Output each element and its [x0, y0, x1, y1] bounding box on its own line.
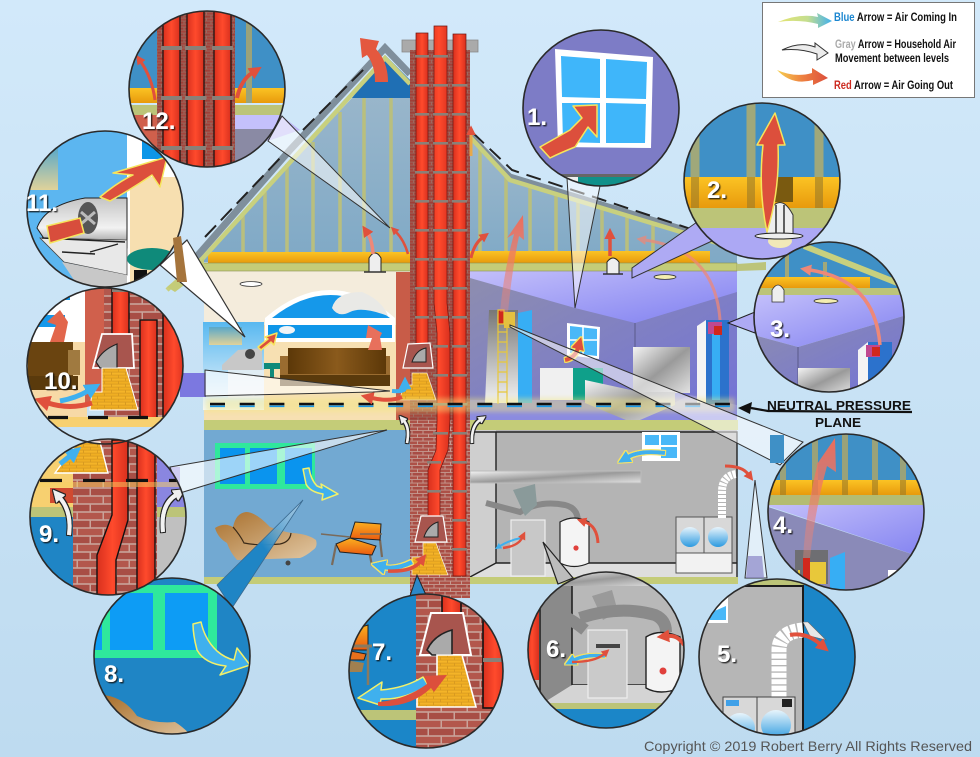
legend blue arrow: [778, 13, 832, 28]
house vents: [364, 253, 676, 279]
callout 11: range hood: 11.: [26, 190, 58, 217]
legend: [762, 2, 974, 98]
vent arrow: [608, 238, 612, 256]
washer and dryer: [722, 696, 796, 734]
living room arrow: [366, 325, 382, 350]
callout 9: plane at chimney: [28, 436, 190, 600]
water heater: [646, 632, 680, 692]
firebox: [90, 368, 138, 410]
basement window: [642, 432, 680, 461]
gray arrow right: [472, 420, 480, 443]
callout 10: upper fireplace: 10.: [44, 368, 77, 395]
neutral pressure dashed line: [210, 404, 737, 406]
basement outlines: [470, 432, 737, 577]
attic red arrow left: [368, 234, 373, 254]
white window post: [127, 129, 142, 289]
arrows: [574, 656, 605, 660]
red arrow: [48, 403, 92, 406]
main duct: [470, 471, 641, 483]
upper left room upper wall: [204, 270, 410, 325]
water heater arrow: [585, 522, 598, 543]
pointer 5: [745, 480, 767, 578]
callout 7: lower fireplace: [345, 590, 507, 750]
pointer 8: [217, 500, 303, 608]
arrow up: [757, 113, 785, 232]
arrow: [810, 270, 880, 345]
flue columns: [416, 26, 466, 576]
gable vent: [352, 55, 410, 98]
callout 6: furnace and water heater: [525, 570, 690, 731]
plenum: [513, 484, 537, 516]
room corner: [634, 323, 636, 400]
upper fireplace hood: [403, 343, 433, 368]
attic space right: [470, 133, 737, 263]
house arrows: [258, 38, 748, 571]
callout 1: window: 1.: [527, 104, 547, 131]
lower hearth red arrow: [388, 562, 420, 571]
lower left room: [204, 430, 410, 577]
brick wall: [85, 286, 105, 406]
callout 7: lower fireplace: 7.: [372, 639, 392, 666]
duct: [563, 573, 649, 586]
neutral pressure glow: [205, 398, 735, 412]
neutral pressure plane label: NEUTRAL PRESSURE: [767, 398, 911, 413]
house cutaway: [167, 26, 766, 598]
attic hatch: [795, 550, 828, 584]
red arrow: [378, 675, 447, 706]
dryer duct: [722, 474, 736, 518]
vent: [772, 285, 784, 302]
attic vent left: [364, 253, 386, 272]
arrows: [141, 62, 155, 100]
legend blue text: Blue Arrow = Air Coming In: [834, 12, 957, 24]
diverter: [96, 344, 117, 368]
arrow into window: [540, 105, 597, 158]
attic red arrow right of chimney: [471, 238, 482, 258]
arrows: [60, 498, 70, 535]
couch: [280, 348, 390, 386]
floor below plane: [25, 417, 185, 427]
callout 10: upper fireplace: [25, 286, 186, 444]
furnace red arrow: [503, 538, 522, 548]
attic studs: [243, 98, 653, 262]
flue joints: [161, 8, 233, 176]
flues: [163, 8, 231, 173]
callout 8: window leak: 8.: [104, 661, 124, 688]
callout 4: attic hatch: [765, 430, 930, 595]
kitchen area: [203, 322, 264, 410]
picture: [25, 148, 58, 190]
bed: [585, 380, 675, 423]
red brick: [50, 488, 73, 503]
basement side wall: [470, 430, 496, 577]
lower fireplace hood: [415, 516, 447, 542]
red arrow: [790, 634, 820, 644]
hood: [420, 613, 471, 655]
window corner: [708, 597, 728, 623]
attic ladder: [498, 310, 515, 404]
furnace flue: [486, 503, 578, 522]
upper hearth red arrow: [372, 397, 402, 400]
callout 3: closet: 3.: [770, 316, 790, 343]
large arrow: [100, 157, 167, 201]
callout 12: chimney top: [125, 8, 290, 176]
callout 8: window leak: [90, 575, 255, 740]
interior brick return: [396, 272, 410, 420]
legend gray arrow: [782, 43, 828, 60]
dresser: [540, 368, 573, 400]
tail of arrow: [47, 218, 84, 243]
headboard: [633, 347, 690, 393]
legend red text: Red Arrow = Air Going Out: [834, 80, 953, 92]
door: [830, 552, 845, 592]
range hood: [37, 198, 127, 248]
callout 1: window: [520, 28, 685, 193]
magnified corner: [770, 435, 784, 463]
callout 5: dryer vent: 5.: [717, 641, 737, 668]
right flue: [482, 620, 502, 709]
diverter: [427, 630, 452, 655]
dryer arrow: [725, 466, 748, 474]
pointer 1: [567, 178, 600, 308]
range: [222, 348, 264, 398]
ceiling light right: [654, 275, 676, 279]
callout 9: plane at chimney: 9.: [39, 521, 59, 548]
upper left room wall: [204, 270, 410, 420]
neutral floor band: [204, 420, 738, 430]
washer and dryer: [676, 517, 732, 573]
teal table: [264, 363, 280, 378]
plane dashes: [40, 479, 186, 482]
callout 5: dryer vent: [698, 578, 856, 736]
flues: [97, 440, 155, 600]
legend red arrow: [777, 68, 828, 85]
callout 12: chimney top: 12.: [142, 108, 175, 135]
firebox: [55, 442, 108, 473]
can light: [755, 202, 803, 248]
pointer 12: [236, 115, 390, 228]
basement floor: [470, 563, 737, 577]
flue columns: [528, 612, 539, 680]
wardrobe arrow: [645, 240, 720, 320]
furnace arrow: [500, 538, 521, 546]
callout 2: can light: [684, 100, 842, 260]
gray arrow left: [404, 421, 408, 443]
attic space left: [198, 55, 410, 263]
blue patch: [142, 129, 187, 159]
chimney cap: [402, 40, 478, 52]
legend gray text line 2: Movement between levels: [835, 53, 949, 65]
arrow to plane: [738, 402, 912, 414]
basement window arrow: [628, 452, 665, 457]
upper right room walls: [470, 270, 737, 420]
draft diverter lower: [424, 522, 438, 537]
copyright: Copyright © 2019 Robert Berry All Rights Reserved: [644, 738, 972, 754]
hood: [93, 334, 134, 368]
neutral pressure plane label: PLANE: [815, 415, 861, 430]
kitchen picture: [209, 327, 242, 345]
blue arrow: [60, 391, 88, 401]
armchair: [321, 522, 382, 566]
lower chimney brick: [410, 420, 470, 598]
flex duct: [779, 630, 803, 697]
attic hatch arrow: [500, 215, 524, 312]
floor: [548, 685, 670, 703]
attic vent right: [603, 258, 623, 274]
chimney brick: [410, 50, 470, 420]
water heater: [560, 518, 589, 566]
window: [555, 49, 653, 148]
attic red arrow chimney: [396, 232, 408, 254]
callout 11: range hood: [25, 129, 187, 289]
hallway door: [485, 310, 532, 403]
draft diverter upper: [412, 348, 426, 362]
pointer 11: [160, 240, 245, 337]
side wall: [540, 586, 572, 700]
lower right basement: [470, 430, 737, 577]
upper fireplace: [400, 373, 436, 400]
upper hearth blue arrow: [392, 388, 405, 391]
ceiling light left: [240, 282, 262, 286]
sofa: [215, 512, 317, 566]
callout 2: can light: 2.: [707, 177, 727, 204]
flue top: [441, 596, 462, 612]
orange arrow chimney side: [470, 134, 472, 156]
couch: [28, 342, 80, 390]
sofa piece: [104, 695, 195, 740]
bedroom window: [567, 323, 600, 359]
legend gray text: Gray Arrow = Household Air: [835, 39, 956, 51]
callout 3: closet: [750, 240, 910, 395]
right eave: [737, 262, 766, 271]
left eave: [167, 258, 204, 292]
furnace: [511, 520, 545, 576]
armchair: [350, 624, 372, 685]
callout 6: furnace and water heater: 6.: [546, 636, 566, 663]
red arrow gable: [360, 38, 388, 82]
fan: [78, 202, 98, 234]
plane dashes: [48, 416, 180, 419]
callout 4: attic hatch: 4.: [773, 512, 793, 539]
bedroom window arrow: [565, 348, 578, 360]
window frame: [90, 585, 217, 658]
flues: [112, 288, 185, 425]
pointer 3: [728, 312, 755, 333]
arched window: [265, 290, 395, 342]
window corner: [888, 570, 897, 577]
ceiling joist: [203, 263, 737, 271]
flue mortar joints: [415, 33, 467, 576]
pointer 4: [510, 325, 803, 465]
glow: [30, 482, 186, 487]
green window: [215, 443, 315, 489]
arrow: [193, 622, 250, 675]
lower hearth blue arrow: [384, 562, 412, 568]
kitchen arrow: [258, 333, 277, 350]
teal bedspread: [573, 368, 603, 400]
wardrobe: [697, 320, 729, 404]
furnace: [588, 630, 627, 698]
pointer 7: [410, 575, 426, 596]
roof rafters and shingles: [167, 48, 760, 290]
teal table: [127, 248, 177, 270]
pointer 10: [180, 370, 390, 397]
firebox: [417, 655, 476, 707]
upper right ceiling: [470, 270, 737, 323]
wall: [130, 175, 187, 285]
light: [814, 299, 838, 303]
closet: [858, 342, 892, 386]
pointer 6: [543, 542, 573, 584]
insulation: [208, 251, 710, 263]
arrow up: [803, 438, 836, 558]
blue arrow: [358, 677, 428, 705]
upper floor strip: [470, 395, 737, 423]
green window arrow: [303, 468, 338, 500]
ground floor slab: [204, 577, 738, 584]
pointer 9: [165, 430, 387, 493]
cooktop: [40, 238, 127, 275]
vent hood: [803, 622, 826, 640]
chimney brick: [157, 8, 235, 173]
brown plank: [173, 236, 187, 282]
pointer 2: [632, 222, 712, 278]
neutral pressure plane label: [738, 398, 912, 430]
lower fireplace: [412, 543, 448, 575]
living room arrow: [47, 310, 68, 342]
